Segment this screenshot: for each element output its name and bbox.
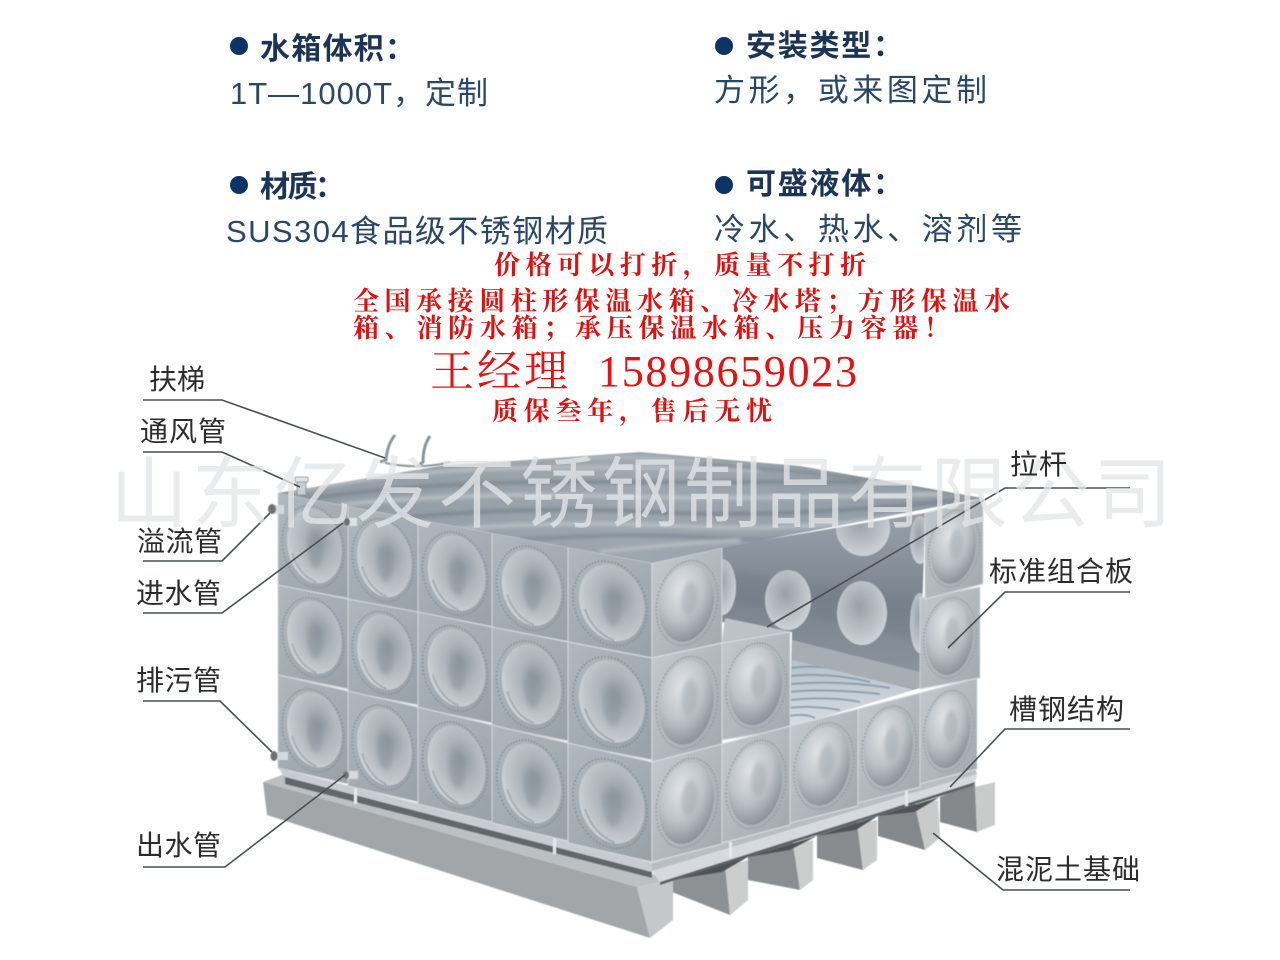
- interior domes: [765, 570, 811, 630]
- bullet: [715, 176, 733, 194]
- heading: 可盛液体：: [746, 168, 903, 201]
- products line 1: 全国承接圆柱形保温水箱、冷水塔；方形保温水: [353, 287, 1010, 316]
- bullet: [715, 37, 733, 55]
- overflow pipe: [268, 504, 284, 514]
- label: inlet pipe: 进水管: [136, 578, 221, 609]
- left labels: [136, 364, 226, 861]
- right labels: [989, 449, 1140, 885]
- contact name and phone: 15898659023: [598, 347, 857, 396]
- spec: tank volume: [230, 33, 488, 111]
- label: concrete base: 混泥土基础: [996, 854, 1140, 885]
- spec: liquids: [714, 168, 1022, 247]
- contact name and phone: 王经理: [430, 347, 568, 396]
- label: drain pipe: 排污管: [136, 665, 221, 696]
- heading: 安装类型：: [746, 30, 903, 63]
- ladder handrails: [380, 435, 450, 466]
- spec: material: [226, 171, 608, 249]
- inlet pipe: [344, 518, 357, 526]
- concrete sleepers: [672, 782, 995, 915]
- label: ladder: 扶梯: [149, 364, 205, 395]
- value: SUS304食品级不锈钢材质: [226, 214, 608, 249]
- tank roof: [278, 452, 983, 563]
- water: [790, 660, 915, 727]
- sleeper shadows: [672, 797, 940, 880]
- label: standard panel: 标准组合板: [989, 556, 1133, 587]
- label: vent pipe: 通风管: [140, 416, 226, 447]
- label: channel steel: 槽钢结构: [1009, 694, 1124, 725]
- long concrete beam: [263, 772, 673, 938]
- bullet: [230, 176, 248, 194]
- price line: 价格可以打折，质量不打折: [494, 250, 866, 281]
- vent pipe: [295, 477, 308, 495]
- heading: 材质：: [260, 171, 345, 204]
- left face panels: [278, 493, 652, 862]
- outlet pipe: [343, 771, 358, 779]
- value: 1T—1000T，定制: [230, 76, 488, 111]
- value: 方形，或来图定制: [714, 73, 987, 108]
- spec: installation type: [714, 30, 987, 108]
- drain pipe: [270, 751, 288, 761]
- watermark: 山东亿发不锈钢制品有限公司: [110, 450, 1172, 538]
- cut-away interior: [708, 500, 930, 727]
- red promo text: [353, 250, 1010, 427]
- cut panel ledge: [722, 618, 792, 643]
- right face panels: [652, 498, 983, 862]
- products line 2: 箱、消防水箱；承压保温水箱、压力容器！: [353, 314, 950, 343]
- bullet: [230, 37, 248, 55]
- heading: 水箱体积：: [260, 33, 415, 66]
- value: 冷水、热水、溶剂等: [714, 212, 1022, 247]
- label: overflow pipe: 溢流管: [137, 526, 222, 557]
- label: outlet pipe: 出水管: [136, 830, 221, 861]
- warranty line: 质保叁年，售后无忧: [492, 396, 772, 427]
- label: tie rod: 拉杆: [1010, 449, 1067, 480]
- leader lines: [143, 400, 1130, 890]
- tank diagram: [263, 435, 995, 938]
- channel steel frame: [278, 768, 977, 885]
